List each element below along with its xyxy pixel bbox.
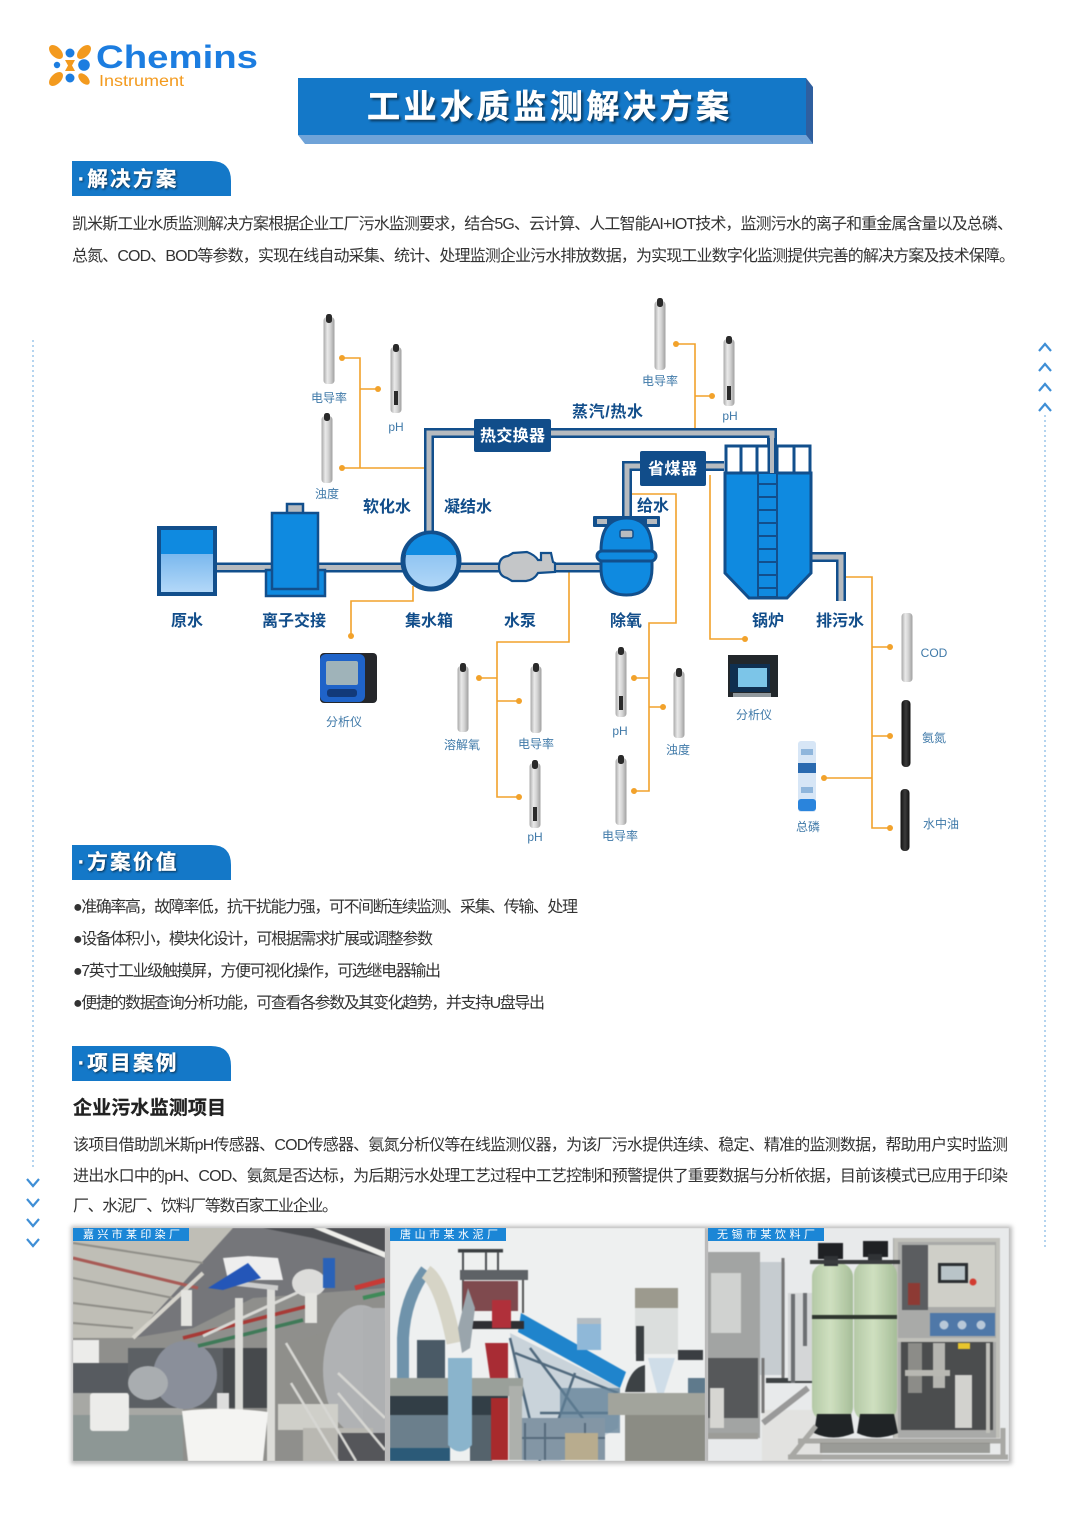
box: heat exchanger: 热交换器: [480, 426, 545, 445]
section heading: 解决方案: ·解决方案: [78, 167, 179, 191]
photo label: 嘉兴: 嘉兴市某印染厂: [83, 1227, 180, 1241]
photo: cement plant: [390, 1228, 705, 1461]
logo word: Instrument: Instrument: [99, 73, 185, 90]
sensor: ammonia nitrogen: [902, 700, 946, 767]
pump: [499, 552, 555, 581]
sensor: pH (steam): [722, 336, 738, 423]
analyzer: right: 分析仪: [736, 708, 772, 722]
sensor: dissolved oxygen: [444, 663, 480, 752]
sensor: pH (feed water): [612, 647, 628, 738]
sensor: total phosphorus: 总磷: [796, 819, 820, 834]
value bullet list: ●便捷的数据查询分析功能，可查看各参数及其变化趋势，并支持U盘导出: [73, 993, 545, 1012]
diagram labels: 给水: [637, 496, 669, 515]
section heading: 项目案例: ·项目案例: [78, 1052, 179, 1075]
solution paragraph: 凯米斯工业水质监测解决方案根据企业工厂污水监测要求，结合5G、云计算、人工智能AI+IOT技术，监测污水的离子和重金属含量以及总磷、: [72, 214, 1013, 233]
sensor: pH (pump line): [527, 760, 543, 844]
diagram labels: 软化水: [363, 497, 411, 516]
photo strip shadow: [71, 1226, 1012, 1464]
sensor: pH (softened water): pH: [388, 420, 404, 434]
sensor: conductivity (feed water): 电导率: [602, 828, 638, 843]
value bullet list: ●设备体积小，模块化设计，可根据需求扩展或调整参数: [73, 930, 433, 948]
sensor: conductivity (feed water): [602, 755, 638, 843]
ion exchanger: [266, 504, 325, 596]
title text: 工业水质监测解决方案: [367, 88, 729, 125]
sensor: conductivity (steam): 电导率: [642, 373, 678, 388]
logo word: Chemins: Chemins: [96, 39, 258, 75]
boiler: [725, 438, 811, 598]
diagram labels: 凝结水: [444, 498, 492, 516]
section heading: 项目案例: [72, 1046, 231, 1081]
sensor: pH (steam): pH: [722, 409, 738, 423]
value bullet list: ●7英寸工业级触摸屏，方便可视化操作，可选继电器输出: [73, 962, 441, 980]
diagram labels: [171, 403, 864, 630]
title banner: [298, 78, 813, 144]
diagram labels: 水泵: [504, 612, 536, 630]
diagram labels: 蒸汽/热水: [572, 403, 643, 421]
diagram labels: 集水箱: [405, 611, 453, 630]
case paragraph: 厂、水泥厂、饮料厂等数百家工业企业。: [73, 1197, 338, 1215]
sensor: conductivity (steam): [642, 298, 678, 388]
sensor: pH (pump line): pH: [527, 830, 543, 844]
solution paragraph: [72, 214, 1015, 265]
sensor: turbidity (feed water): 浊度: [666, 742, 690, 757]
sensor: pH (feed water): pH: [612, 724, 628, 738]
case paragraph: [73, 1136, 1008, 1215]
photo: dye factory: [73, 1228, 385, 1461]
sensor: turbidity (feed water): [666, 668, 690, 757]
analyzer: left: 分析仪: [326, 715, 362, 729]
section heading: 方案价值: [72, 845, 231, 880]
case paragraph: 该项目借助凯米斯pH传感器、COD传感器、氨氮分析仪等在线监测仪器，为该厂污水提供连续、稳定、精准的监测数据，帮助用户实时监测: [73, 1136, 1008, 1154]
diagram labels: 离子交接: [262, 611, 326, 630]
solution paragraph: 总氮、COD、BOD等参数，实现在线自动采集、统计、处理监测企业污水排放数据，为实现工业数字化监测提供完善的解决方案及技术保障。: [72, 247, 1015, 265]
orange sensor connector lines: [339, 341, 893, 831]
analyzer: right: [728, 655, 778, 722]
decorative side dotted lines and chevrons: [27, 340, 1051, 1250]
sensor: oil in water: 水中油: [923, 816, 959, 831]
box: economizer: 省煤器: [648, 460, 697, 478]
sensor: conductivity (softened water): 电导率: [311, 390, 347, 405]
value bullet list: ●准确率高，故障率低，抗干扰能力强，可不间断连续监测、采集、传输、处理: [73, 898, 578, 916]
sensor: ammonia nitrogen: 氨氮: [922, 730, 946, 745]
sensor: total phosphorus: [796, 741, 820, 834]
sensor: conductivity (pump line): 电导率: [518, 736, 554, 751]
section heading: 方案价值: ·方案价值: [78, 850, 179, 874]
tank: raw water: [159, 528, 215, 594]
diagram labels: 除氧: [610, 611, 642, 630]
deaerator: [593, 516, 660, 595]
sensor: COD: COD: [921, 646, 948, 660]
case paragraph: 进出水口中的pH、COD、氨氮是否达标，为后期污水处理工艺过程中工艺控制和预警提供了重要数据与分析依据，目前该模式已应用于印染: [73, 1166, 1008, 1185]
case subtitle: 企业污水监测项目: [73, 1096, 226, 1119]
value bullet list: [73, 898, 578, 1012]
photo: beverage plant: [708, 1228, 1009, 1461]
sensor: conductivity (pump line): [518, 663, 554, 751]
collection tank: [403, 533, 459, 589]
photo label: 唐山: 唐山市某水泥厂: [400, 1227, 498, 1241]
sensor: conductivity (softened water): [311, 314, 347, 405]
sensor: COD: [902, 613, 948, 682]
analyzer: left: [320, 653, 377, 729]
sensor: dissolved oxygen: 溶解氧: [444, 737, 480, 752]
photo label: 无锡: 无锡市某饮料厂: [717, 1227, 815, 1241]
sensor: oil in water: [900, 789, 959, 851]
sensor: turbidity (softened water): 浊度: [315, 486, 339, 501]
icon: logo petals and dots: [46, 42, 94, 89]
diagram labels: 排污水: [816, 612, 864, 630]
sensor: turbidity (softened water): [315, 413, 339, 501]
sensor: pH (softened water): [388, 344, 404, 434]
box: economizer: [640, 451, 706, 486]
process diagram: [159, 298, 959, 851]
diagram labels: 原水: [171, 612, 203, 630]
logo: Chemins Instrument: [46, 39, 258, 90]
diagram labels: 锅炉: [752, 612, 784, 630]
section heading: 解决方案: [72, 161, 231, 196]
pipes: [217, 433, 841, 601]
box: heat exchanger: [474, 419, 551, 452]
